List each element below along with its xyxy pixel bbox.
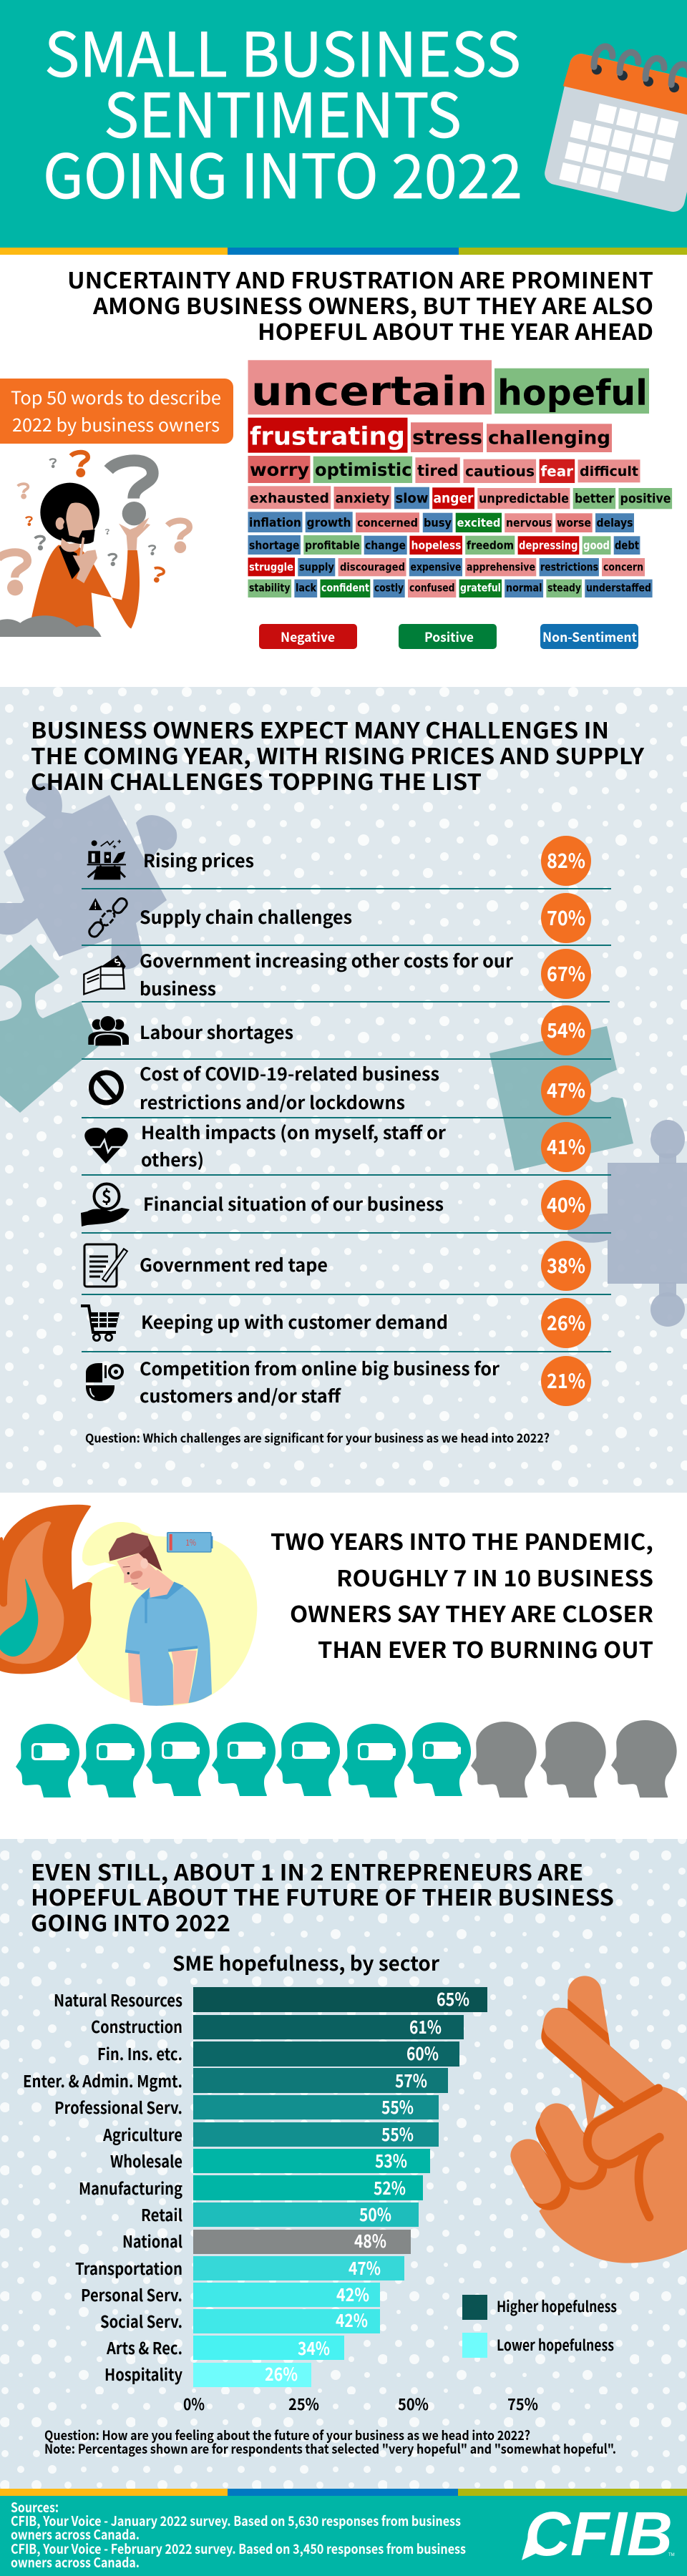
word: cautious <box>464 459 536 483</box>
label: online competition: customers and/or staff <box>140 1382 341 1408</box>
word: expensive: expensive <box>411 560 461 573</box>
word: freedom <box>465 536 515 555</box>
word: anxiety: anxiety <box>335 491 390 507</box>
bar: arts and rec <box>106 2335 344 2361</box>
icon: people <box>88 1015 129 1045</box>
bar: arts and rec: Arts & Rec. <box>106 2335 182 2359</box>
bar: wholesale <box>110 2147 430 2173</box>
bar: agriculture <box>102 2121 439 2147</box>
illustration: crossed fingers <box>510 1976 687 2263</box>
axis labels: 75% <box>507 2392 538 2415</box>
heading: challenges: BUSINESS OWNERS EXPECT MANY CHALLENGES IN <box>31 713 609 745</box>
heading: burnout <box>271 1524 653 1664</box>
word: freedom: freedom <box>467 538 514 552</box>
bar chart: hopefulness by sector <box>23 1986 538 2415</box>
word: frustrating: frustrating <box>250 423 405 452</box>
sources: owners across Canada. <box>11 2552 140 2572</box>
word: slow <box>394 487 429 509</box>
heading: hopefulness: HOPEFUL ABOUT THE FUTURE OF THEIR BUSINESS <box>31 1880 614 1912</box>
label: government red tape: Government red tape <box>140 1252 328 1277</box>
word: exhausted: exhausted <box>250 491 329 507</box>
word: debt <box>614 536 640 555</box>
word: fear <box>540 459 575 483</box>
bar: natural resources <box>54 1986 487 2012</box>
icon: computer mouse <box>86 1363 122 1401</box>
title <box>43 6 522 216</box>
value: 40% <box>541 1180 591 1230</box>
word: understaffed: understaffed <box>586 582 651 595</box>
legend: hopefulness: Lower hopefulness <box>497 2334 614 2356</box>
bar: national: National <box>122 2228 182 2253</box>
footer <box>0 2489 687 2576</box>
sources: owners across Canada. <box>11 2524 140 2544</box>
icon: supply chain <box>87 897 129 939</box>
word: grateful <box>459 580 502 597</box>
bar: personal serv: Personal Serv. <box>81 2282 182 2306</box>
logo: CFIB: TM <box>668 2553 675 2557</box>
word: grateful: grateful <box>460 582 501 595</box>
word: depressing <box>518 536 579 555</box>
word: depressing: depressing <box>519 538 578 552</box>
bar: construction: Construction <box>91 2014 182 2038</box>
word: better <box>573 488 615 509</box>
word: good <box>583 536 611 555</box>
panel: hopefulness background <box>0 1839 687 2489</box>
logo: CFIB: CFIB <box>525 2499 673 2569</box>
value: 82%: 82% <box>547 846 585 874</box>
word: difficult: difficult <box>580 464 638 479</box>
bar: construction <box>91 2014 464 2039</box>
word: delays: delays <box>597 516 633 530</box>
legend item: non-sentiment: Non-Sentiment <box>542 628 637 646</box>
value: 47% <box>541 1065 591 1116</box>
word cloud <box>248 360 672 597</box>
sources: CFIB, Your Voice - January 2022 survey. Based on 5,630 responses from business <box>11 2511 461 2530</box>
word: discouraged: discouraged <box>340 560 405 573</box>
decoration: puzzle pieces <box>0 783 687 1327</box>
icon: hand with dollar: $ <box>102 1183 112 1208</box>
word: restrictions: restrictions <box>540 560 598 573</box>
word: busy: busy <box>424 516 452 530</box>
icon: hand with dollar <box>81 1183 130 1226</box>
sources: CFIB, Your Voice - February 2022 survey. Based on 3,450 responses from business <box>11 2539 466 2558</box>
word: nervous <box>505 513 552 532</box>
icon: rising prices <box>87 840 126 879</box>
word: unpredictable <box>477 488 570 509</box>
word: excited: excited <box>457 516 501 530</box>
legend: hopefulness: Higher hopefulness <box>497 2296 617 2317</box>
legend item: positive <box>399 624 497 649</box>
word: anxiety <box>333 487 391 509</box>
word: concerned: concerned <box>357 516 418 530</box>
question note: challenges: Question: Which challenges are significant for your business as we head into 2022? <box>85 1428 550 1446</box>
heading: challenges <box>31 713 645 796</box>
word: cautious: cautious <box>465 462 535 479</box>
value: 41%: 41% <box>547 1132 585 1161</box>
word: confident: confident <box>321 582 369 595</box>
legend: word sentiment <box>259 624 638 649</box>
word: struggle: struggle <box>249 560 293 573</box>
icon: low battery: 1% <box>185 1536 196 1548</box>
bar: fin ins etc: Fin. Ins. etc. <box>97 2041 182 2065</box>
word: restrictions <box>540 558 599 576</box>
bar: social serv: 42% <box>336 2307 368 2333</box>
word: change: change <box>365 538 406 552</box>
legend item: positive: Positive <box>424 628 474 646</box>
value: 67%: 67% <box>547 959 585 987</box>
sources: Sources: <box>11 2497 59 2517</box>
label: online competition: Competition from online big business for <box>140 1355 500 1381</box>
word: struggle <box>248 557 295 576</box>
label: health impacts: Health impacts (on myself, staff or <box>141 1119 446 1145</box>
heading: hopefulness: EVEN STILL, ABOUT 1 IN 2 ENTREPRENEURS ARE <box>31 1855 583 1887</box>
icon: wallet with money <box>84 955 126 994</box>
word: apprehensive: apprehensive <box>467 560 535 573</box>
icon: low battery <box>167 1533 213 1552</box>
icon: shopping cart <box>81 1306 120 1341</box>
heading: burnout: THAN EVER TO BURNING OUT <box>318 1632 653 1664</box>
word: inflation: inflation <box>249 516 301 530</box>
bar: transportation <box>75 2255 404 2280</box>
word: steady: steady <box>547 582 581 595</box>
bar: social serv: Social Serv. <box>100 2308 182 2333</box>
icon: heart with pulse <box>84 1128 128 1163</box>
value: 67% <box>541 949 591 999</box>
label: government increasing other costs: Government increasing other costs for our <box>140 947 513 973</box>
bar: professional serv: Professional Serv. <box>54 2094 182 2119</box>
word: fear: fear <box>541 462 573 479</box>
word: costly <box>374 580 405 597</box>
word: busy <box>423 513 452 532</box>
word: costly: costly <box>374 582 404 595</box>
word: slow: slow <box>395 491 428 507</box>
bar: hospitality: 26% <box>265 2361 298 2386</box>
word: lack <box>294 580 317 597</box>
bar: natural resources: 65% <box>437 1986 469 2011</box>
bar: manufacturing: 52% <box>374 2175 406 2200</box>
callout: top 50 words: 2022 by business owners <box>12 411 220 437</box>
word: hopeless: hopeless <box>411 538 461 552</box>
heading: hopefulness: GOING INTO 2022 <box>31 1906 230 1938</box>
header banner <box>0 0 687 255</box>
callout: top 50 words: Top 50 words to describe <box>11 384 221 410</box>
bar: construction: 61% <box>409 2014 442 2039</box>
word: unpredictable: unpredictable <box>479 492 569 507</box>
flame <box>0 1505 92 1674</box>
legend item: negative: Negative <box>281 628 335 646</box>
bar: social serv <box>100 2307 380 2333</box>
value: 47%: 47% <box>547 1075 585 1104</box>
bar: agriculture: Agriculture <box>102 2122 182 2146</box>
bar: manufacturing <box>79 2175 423 2200</box>
word: supply: supply <box>299 560 334 573</box>
label: rising prices: Rising prices <box>143 847 254 873</box>
challenge list <box>81 836 611 1408</box>
word: anger <box>432 487 474 509</box>
value: 70%: 70% <box>547 903 585 932</box>
heading: burnout: OWNERS SAY THEY ARE CLOSER <box>290 1596 653 1629</box>
bar: personal serv: 42% <box>336 2281 369 2307</box>
heading: uncertainty and frustration <box>67 263 653 346</box>
value: 54% <box>541 1005 591 1055</box>
word: difficult <box>578 459 640 482</box>
word: lack: lack <box>296 582 317 595</box>
label: government increasing other costs <box>140 947 513 1001</box>
word: good: good <box>583 538 610 552</box>
title: GOING INTO 2022 <box>43 128 522 216</box>
heading: challenges: THE COMING YEAR, WITH RISING PRICES AND SUPPLY <box>31 738 645 771</box>
bar: hospitality <box>104 2361 311 2387</box>
bar: manufacturing: Manufacturing <box>79 2175 182 2200</box>
bar: professional serv: 55% <box>381 2094 414 2119</box>
word: anger: anger <box>434 491 474 507</box>
icon: prohibited sign <box>92 1073 122 1103</box>
chart title: SME hopefulness, by sector <box>172 1948 440 1977</box>
label: supply chain challenges: Supply chain challenges <box>140 904 352 930</box>
word: worse: worse <box>557 516 591 530</box>
legend: hopefulness <box>462 2295 617 2358</box>
word: profitable <box>303 535 361 555</box>
word: positive <box>618 488 672 509</box>
bar: agriculture: 55% <box>381 2121 414 2147</box>
word: excited <box>456 513 502 532</box>
axis labels: 0% <box>183 2392 205 2415</box>
label: covid restrictions: restrictions and/or lockdowns <box>140 1089 405 1115</box>
colour stripe <box>0 2489 687 2496</box>
word: inflation <box>248 512 302 532</box>
word: stability <box>248 580 291 597</box>
word: stress: stress <box>412 426 482 449</box>
callout: top 50 words <box>0 379 233 444</box>
word: steady <box>546 580 582 597</box>
title: SENTIMENTS <box>104 67 462 155</box>
word: discouraged <box>338 558 406 576</box>
value: 26% <box>541 1298 591 1348</box>
bar: arts and rec: 34% <box>298 2335 330 2361</box>
word: shortage <box>248 535 301 555</box>
label: customer demand: Keeping up with customer demand <box>141 1309 448 1335</box>
question note: hopefulness: Question: How are you feeling about the future of your business as we head into 2022? <box>44 2426 530 2444</box>
bar: national: 48% <box>354 2228 386 2253</box>
label: health impacts: others) <box>141 1146 204 1172</box>
pictogram: 7 in 10 burnt-out heads <box>16 1720 677 1797</box>
word: delays <box>595 513 634 532</box>
heading: uncertainty and frustration: AMONG BUSINESS OWNERS, BUT THEY ARE ALSO <box>92 288 653 321</box>
title: SMALL BUSINESS <box>44 6 521 94</box>
illustration: burnt-out man <box>0 1505 257 1706</box>
word: tired <box>415 457 460 483</box>
word: uncertain: uncertain <box>251 369 487 415</box>
bar: retail: 50% <box>359 2201 391 2227</box>
value: 21%: 21% <box>547 1366 585 1395</box>
word: hopeless <box>409 536 462 555</box>
word: normal: normal <box>506 582 542 595</box>
word: debt: debt <box>615 538 639 552</box>
label: labour shortages: Labour shortages <box>140 1019 293 1045</box>
word: growth: growth <box>306 516 351 530</box>
label: covid restrictions: Cost of COVID-19-related business <box>140 1060 439 1086</box>
value: 26%: 26% <box>547 1308 585 1337</box>
icon: document and pen <box>84 1244 126 1287</box>
word: nervous: nervous <box>506 516 552 530</box>
bar: wholesale: 53% <box>375 2147 407 2173</box>
legend item: negative <box>259 624 357 649</box>
bar: retail: Retail <box>141 2202 182 2226</box>
icon: calendar <box>541 39 687 214</box>
label: government increasing other costs: business <box>140 975 216 1001</box>
axis labels: 25% <box>288 2392 319 2415</box>
word: concerned <box>356 512 419 532</box>
bar: transportation: Transportation <box>75 2255 182 2280</box>
value: 41% <box>541 1122 591 1172</box>
word: tired: tired <box>417 462 458 479</box>
value: 38%: 38% <box>547 1251 585 1279</box>
value: 21% <box>541 1356 591 1406</box>
word: challenging: challenging <box>488 428 610 449</box>
word: stability: stability <box>249 582 291 595</box>
word: concern: concern <box>603 560 643 573</box>
word: expensive <box>409 558 462 576</box>
bar: enter and admin mgmt: 57% <box>395 2067 427 2093</box>
value: 54%: 54% <box>547 1015 585 1044</box>
word: normal <box>505 580 543 597</box>
man <box>109 1533 212 1706</box>
word: hopeful: hopeful <box>497 373 648 414</box>
label: online competition <box>140 1355 500 1408</box>
heading: challenges: CHAIN CHALLENGES TOPPING THE LIST <box>31 764 482 796</box>
bar: enter and admin mgmt: Enter. & Admin. Mgmt. <box>23 2068 182 2092</box>
panel: challenges background <box>0 687 687 1493</box>
word: positive: positive <box>620 492 671 507</box>
bar: enter and admin mgmt <box>23 2067 448 2093</box>
bar: retail <box>141 2201 419 2227</box>
bar: transportation: 47% <box>349 2255 381 2280</box>
colour stripe <box>0 248 687 255</box>
word: worse <box>555 513 593 532</box>
icon: wallet with money: $ <box>111 955 123 970</box>
word: confident <box>321 580 370 597</box>
value: 82% <box>541 836 591 886</box>
question note: hopefulness: Note: Percentages shown are for respondents that selected "very hopeful" and "somewhat hopeful". <box>44 2439 616 2458</box>
word: optimistic: optimistic <box>315 459 412 480</box>
value: 40%: 40% <box>547 1190 585 1219</box>
word: confused: confused <box>409 582 455 595</box>
value: 38% <box>541 1241 591 1291</box>
word: exhausted <box>248 486 331 509</box>
bar: wholesale: Wholesale <box>110 2148 182 2172</box>
bar: natural resources: Natural Resources <box>54 1987 182 2011</box>
bar: fin ins etc <box>97 2040 459 2067</box>
axis labels <box>183 2392 538 2415</box>
word: understaffed <box>585 580 653 597</box>
bar: professional serv <box>54 2094 439 2119</box>
word: change <box>364 536 407 555</box>
label: health impacts <box>141 1119 446 1172</box>
illustration: confused man with question marks <box>0 452 190 637</box>
word: confused <box>408 580 456 597</box>
bar: personal serv <box>81 2281 380 2307</box>
word: worry: worry <box>250 459 309 480</box>
bar: hospitality: Hospitality <box>104 2361 182 2386</box>
heading: burnout: ROUGHLY 7 IN 10 BUSINESS <box>336 1561 653 1593</box>
sources <box>11 2497 466 2572</box>
heading: burnout: TWO YEARS INTO THE PANDEMIC, <box>271 1524 653 1556</box>
word: growth <box>306 512 353 532</box>
word: better: better <box>575 492 614 507</box>
word: concern <box>602 558 645 576</box>
word: profitable: profitable <box>305 538 360 552</box>
bar: fin ins etc: 60% <box>406 2040 439 2066</box>
label: financial situation: Financial situation of our business <box>143 1191 444 1216</box>
heading: uncertainty and frustration: HOPEFUL ABOUT THE YEAR AHEAD <box>258 314 653 346</box>
label: covid restrictions <box>140 1060 439 1115</box>
heading: hopefulness <box>31 1855 614 1938</box>
yellow backdrop <box>77 1522 257 1706</box>
heading: uncertainty and frustration: UNCERTAINTY AND FRUSTRATION ARE PROMINENT <box>67 263 653 295</box>
question note: hopefulness <box>44 2426 616 2458</box>
value: 70% <box>541 893 591 943</box>
bar: national <box>122 2228 411 2254</box>
word: apprehensive <box>465 558 536 576</box>
word: supply <box>298 558 335 576</box>
word: shortage: shortage <box>249 538 300 552</box>
axis labels: 50% <box>398 2392 429 2415</box>
